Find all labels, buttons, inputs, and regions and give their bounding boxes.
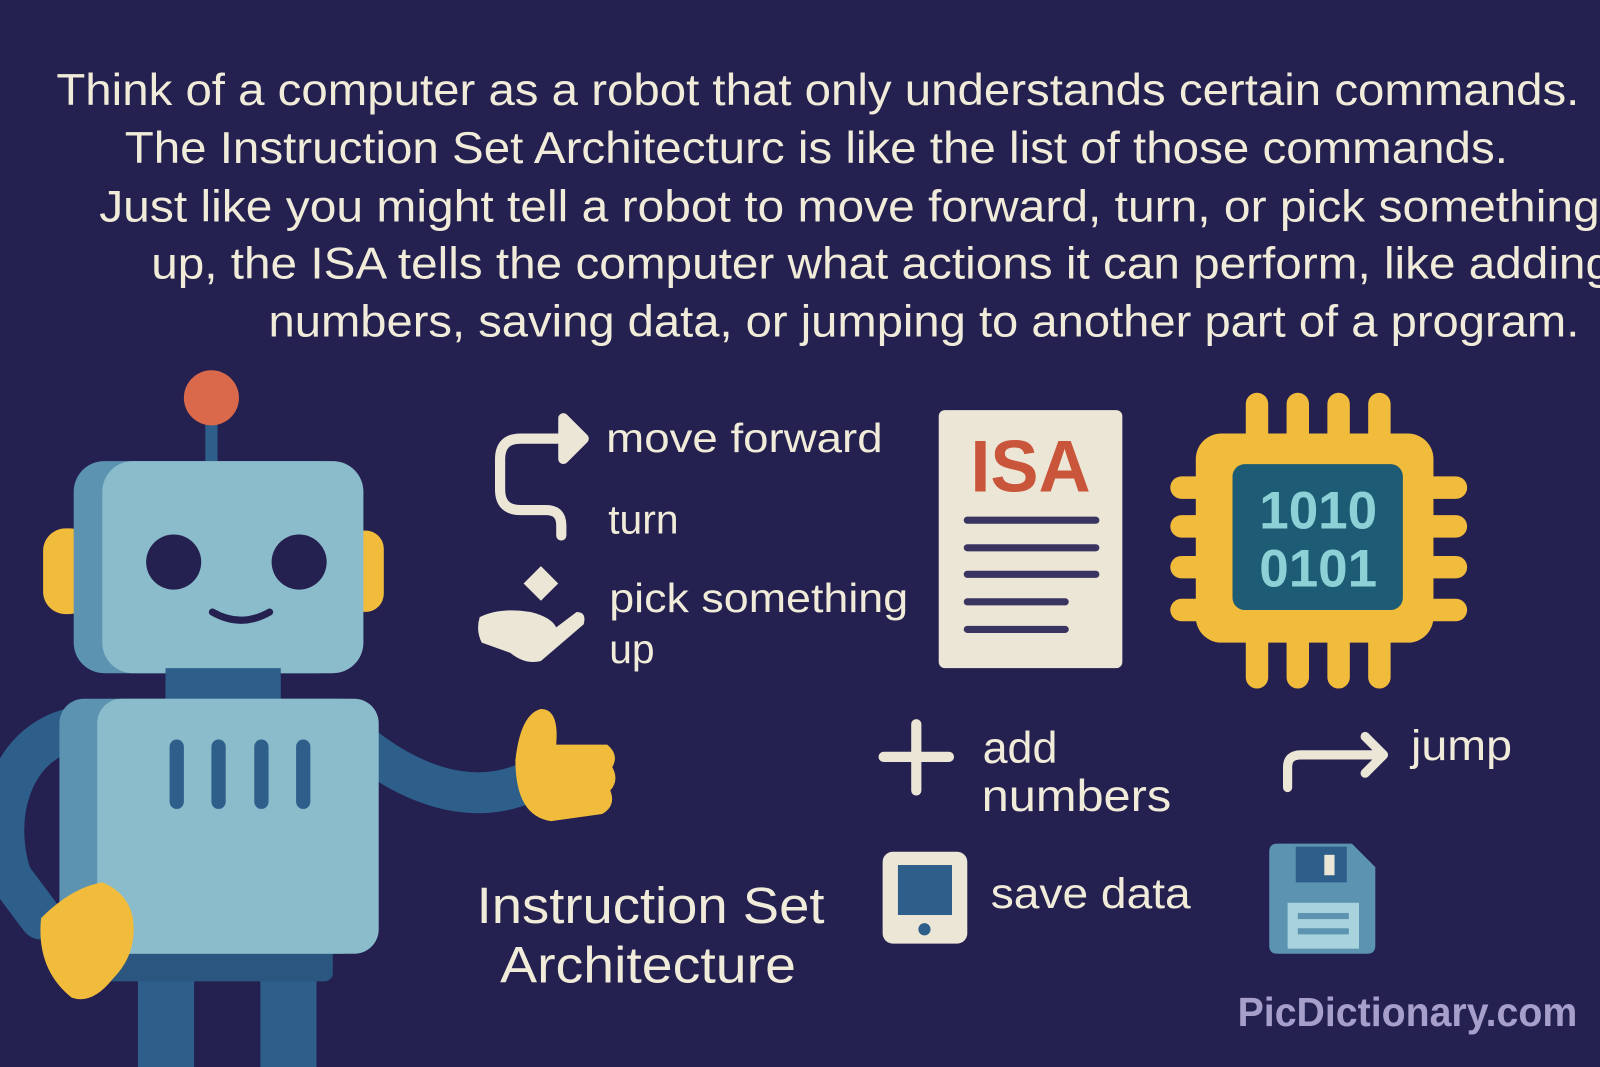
chip: 1010 — [1259, 481, 1377, 540]
intro text: Just like you might tell a robot to move forward, turn, or pick something — [99, 180, 1600, 231]
icon: tablet — [883, 852, 967, 944]
add numbers label: numbers — [982, 770, 1171, 821]
heading: Instruction Set Architecture — [477, 877, 824, 993]
icon: move forward / turn arrow — [500, 418, 584, 536]
heading: Instruction Set Architecture: Instruction Set — [477, 877, 824, 934]
intro text: Think of a computer as a robot that only understands certain commands. — [56, 64, 1579, 115]
intro text: up, the ISA tells the computer what actions it can perform, like adding — [151, 237, 1600, 288]
commands text: pick something — [609, 575, 908, 621]
icon: hand — [478, 566, 584, 662]
ISA document: ISA — [970, 426, 1091, 508]
chip: 0101 — [1259, 540, 1377, 599]
watermark: PicDictionary.com — [1238, 989, 1577, 1035]
robot — [3, 370, 615, 1067]
add numbers label — [982, 722, 1171, 821]
icon: plus — [884, 724, 949, 791]
intro text: The Instruction Set Architecturc is like the list of those commands. — [125, 122, 1508, 173]
icon: jump arrow — [1288, 736, 1383, 787]
icon: floppy — [1269, 844, 1375, 954]
save data label: save data — [991, 870, 1191, 918]
commands text: move forward — [606, 415, 883, 461]
add numbers label: add — [983, 722, 1057, 773]
commands text: turn — [608, 496, 679, 542]
jump label: jump — [1409, 722, 1512, 770]
intro text — [56, 64, 1600, 347]
intro text: numbers, saving data, or jumping to another part of a program. — [269, 296, 1579, 347]
commands text — [606, 415, 908, 672]
heading: Instruction Set Architecture: Architecture — [500, 936, 796, 993]
chip — [1170, 393, 1467, 689]
commands text: up — [609, 626, 655, 672]
ISA document — [939, 410, 1122, 668]
